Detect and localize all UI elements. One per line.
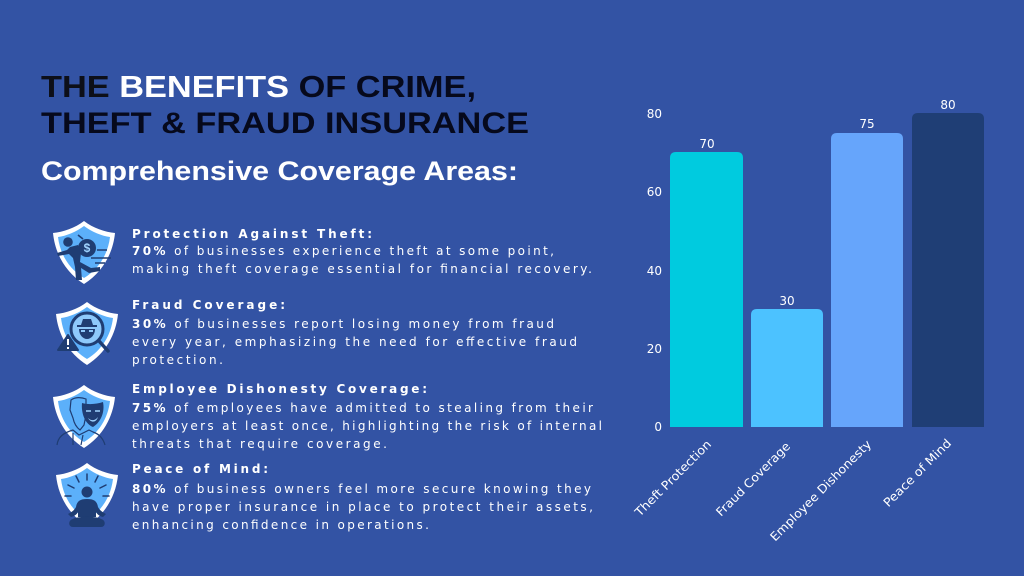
x axis labels	[631, 436, 954, 544]
y axis labels: 20	[647, 342, 662, 356]
y axis labels: 40	[647, 264, 662, 278]
subtitle: Comprehensive Coverage Areas:	[41, 156, 518, 186]
item: protection against theft	[53, 221, 592, 284]
heading: Peace of Mind:	[132, 462, 268, 476]
text block: every year, emphasizing the need for effective fraud	[132, 335, 577, 349]
title	[41, 69, 529, 140]
icon: magnifier with spy on shield	[56, 302, 118, 365]
item: peace of mind	[56, 462, 593, 532]
bar: employee dishonesty 75	[831, 117, 903, 427]
x axis labels: Employee Dishonesty	[767, 437, 874, 544]
title: THEFT & FRAUD INSURANCE	[41, 107, 529, 140]
bar: theft protection 70: 70	[699, 137, 715, 151]
bar: employee dishonesty 75: 75	[859, 117, 875, 131]
y axis labels: 80	[647, 107, 662, 121]
icon: thief on shield: $	[84, 241, 91, 255]
text block	[132, 244, 592, 276]
heading: Protection Against Theft:	[132, 227, 372, 241]
title: THE BENEFITS OF CRIME,	[41, 69, 476, 104]
heading: Fraud Coverage:	[132, 298, 285, 312]
heading: Employee Dishonesty Coverage:	[132, 382, 427, 396]
x axis labels: Peace of Mind	[881, 436, 954, 510]
bar: theft protection 70	[670, 137, 743, 427]
text block: employers at least once, highlighting the risk of internal	[132, 419, 602, 433]
text block: 30% of businesses report losing money from fraud	[132, 317, 554, 331]
text block	[132, 482, 593, 532]
y axis labels: 60	[647, 185, 662, 199]
text block	[132, 401, 602, 451]
text block: 75% of employees have admitted to stealing from their	[132, 401, 593, 415]
bar: peace of mind 80	[912, 98, 984, 427]
text block: protection.	[132, 353, 223, 367]
icon: man with mask on shield	[53, 385, 115, 448]
item: fraud coverage	[56, 298, 577, 367]
text block: 70% of businesses experience theft at some point,	[132, 244, 554, 258]
y axis labels	[647, 107, 662, 434]
bar: fraud coverage 30	[751, 294, 823, 427]
icon: meditating person on shield	[56, 463, 118, 527]
x axis labels: Fraud Coverage	[713, 439, 793, 519]
y axis labels: 0	[654, 420, 662, 434]
text block: enhancing confidence in operations.	[132, 518, 429, 532]
text block: 80% of business owners feel more secure knowing they	[132, 482, 591, 496]
bar chart	[631, 98, 984, 544]
text block: threats that require coverage.	[132, 437, 387, 451]
item: employee dishonesty coverage	[53, 382, 602, 451]
text block: have proper insurance in place to protect their assets,	[132, 500, 593, 514]
bar: peace of mind 80: 80	[940, 98, 956, 112]
icon: thief on shield	[53, 221, 115, 284]
bar: fraud coverage 30: 30	[779, 294, 795, 308]
text block	[132, 317, 577, 367]
text block: making theft coverage essential for financial recovery.	[132, 262, 592, 276]
x axis labels: Theft Protection	[631, 437, 714, 520]
